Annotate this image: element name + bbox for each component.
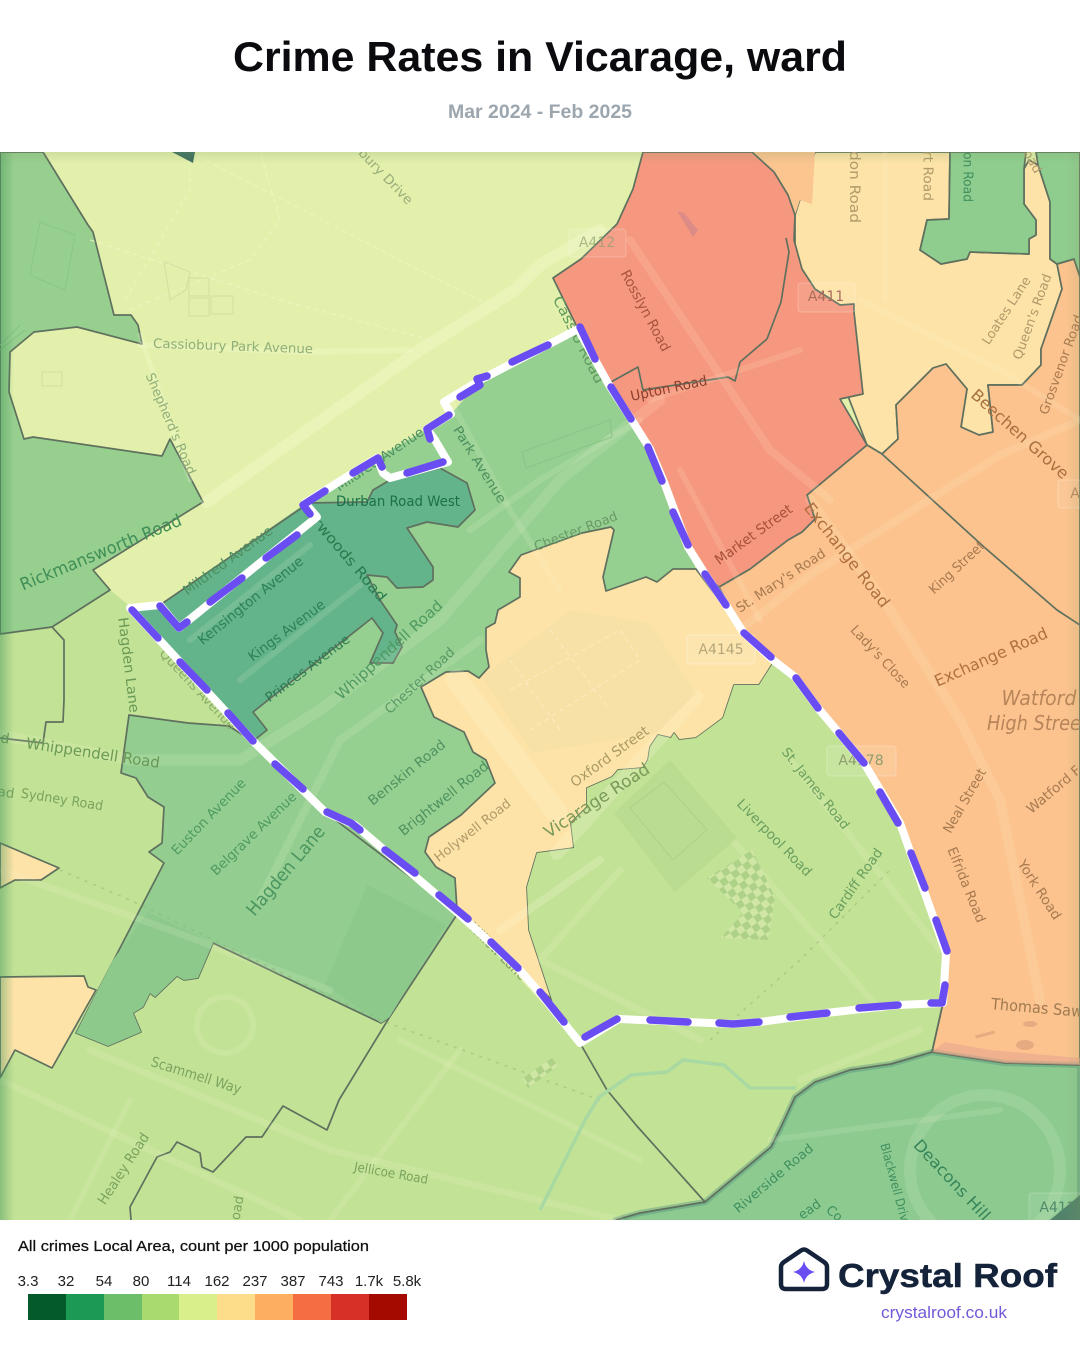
street labels: Oxford Street [568,723,653,791]
street labels: Rickmansworth Road [17,511,185,595]
zone: ward cream [421,527,773,1000]
road badges [569,229,1080,1223]
logo: Crystal Roof [781,1250,1058,1322]
street labels: Cassio Road [549,294,607,386]
street labels: Deacons Hill [910,1135,994,1225]
street labels: Jellicoe Road [352,1160,429,1188]
legend tick labels: 743 [318,1273,344,1290]
zone: bottom boundary line [616,1052,1080,1220]
street labels: Exchange Road [800,499,894,611]
street labels: Healey Road [95,1130,153,1208]
street labels: Scammell Way [149,1054,243,1098]
street labels: bury Drive [355,146,415,208]
zone: right orange [719,259,1080,1065]
badge A411 [798,283,855,312]
street labels: Co [823,1203,845,1225]
street labels: Princes Avenue [263,632,353,706]
legend tick labels: 5.8k [393,1273,422,1290]
choropleth zones [0,152,1080,1225]
zone: top orange strip [752,152,815,215]
rail platforms west [0,325,25,350]
zone: darker strip west [76,942,213,1046]
parcel: park buildings [30,222,233,386]
badge A412: A412 [579,235,615,251]
legend tick labels: 162 [204,1273,230,1290]
street labels: Queens Avenue [156,646,238,734]
street labels: ead [796,1197,824,1223]
salmon inner boundary [611,238,789,390]
zone: far-right green [1036,152,1080,277]
wordmark: Crystal Roof [838,1257,1058,1294]
street labels: Chester Road [382,644,458,718]
street labels: Vicarage Road [540,759,654,843]
zone: top-right green pocket [920,152,1036,264]
checkered estate [707,850,775,940]
street labels: York Road [1013,856,1064,923]
parcel: cricket pavilion rows [522,420,612,468]
street labels: Durban Road West [336,494,460,510]
legend tick labels: 114 [167,1273,191,1290]
stadium [614,760,737,892]
legend title: All crimes Local Area, count per 1000 population [18,1238,369,1255]
street labels: rt Road [920,151,934,201]
legend tick labels: 32 [58,1273,74,1290]
street labels: oad [1019,148,1045,176]
zone: upper-left green [0,152,203,634]
street labels: Euston Avenue [169,775,249,859]
orange inner boundary [882,454,1080,625]
map edge vignette [0,152,1080,1220]
street labels: Neal Street [940,766,990,836]
dashed paths and railway [60,870,890,1100]
badge A4145 [687,635,755,664]
legend tick labels: 237 [242,1273,268,1290]
street labels: Watford [1002,686,1077,710]
pond marks [975,1021,1037,1050]
street labels: St. James Road [778,745,852,833]
ward boundary: white line [130,329,946,1043]
street labels: Cassiobury Park Avenue [153,337,313,357]
zone: top-right cream [795,152,1062,454]
zone: dark green Kensington Avenue [130,468,475,742]
street labels: Elfrida Road [944,845,988,925]
street labels: on Road [960,152,974,202]
zone: lower-left light green [0,590,943,1220]
icon: house with star [781,1250,827,1289]
street labels: Shepherd's Road [142,371,198,477]
legend tick labels [18,1273,422,1290]
street labels: oad [229,1195,247,1221]
badge A412 [569,229,626,257]
legend tick labels: 54 [96,1273,112,1290]
street labels: St. Mary's Road [733,546,829,616]
street labels: don Road [846,151,862,223]
legend tick labels: 80 [133,1273,149,1290]
street labels: Chester Road [532,509,620,555]
river [540,1060,796,1210]
badge A411: A411 [808,289,844,305]
street labels: Upton Road [629,373,709,405]
street labels: Rosslyn Road [617,268,673,354]
badge A4145: A4145 [698,642,744,658]
street labels: Whippendell Road [332,596,446,704]
street labels: Park Avenue [449,424,509,506]
legend [18,1238,422,1320]
street labels: Brightwell Road [396,759,492,839]
street labels: rwoods Road [309,515,389,605]
street labels: Kensington Avenue [195,554,307,648]
legend colour ramp [28,1294,407,1320]
street labels: King Street [926,538,988,598]
street labels: Whippendell Road [25,734,161,772]
badge A4178: A4178 [838,753,884,769]
website: crystalroof.co.uk [881,1304,1008,1322]
retail block [654,690,696,734]
zone: ward light green [527,663,946,1043]
street labels: Lady's Close [847,622,913,692]
title: Crime Rates in Vicarage, ward [233,33,847,80]
street labels: Kings Avenue [245,597,329,665]
zone: left cream lower [0,976,96,1078]
street labels [0,146,1080,1225]
street labels: Cardiff Road [826,845,886,923]
street labels: Hagden Lane [242,822,330,920]
street labels: Blackwell Driv [877,1141,913,1223]
badge A4178 [827,746,896,776]
zone: Hagden Lane green [76,715,458,1046]
street labels: Exchange Road [931,624,1051,690]
lower-left boundaries [0,627,943,1220]
street labels: Benskin Road [365,737,449,809]
legend tick labels: 387 [280,1273,306,1290]
legend tick labels: 3.3 [18,1273,38,1290]
river shore shadow [932,1042,1080,1065]
stadium pitch [630,782,707,860]
retail dashed paths [510,630,640,730]
street labels: Market Street [712,501,796,569]
street labels: Willow Lane [465,920,529,984]
park paths [90,152,500,340]
badge A4125 [1029,1193,1080,1223]
street labels: Beechen Grove [967,385,1073,483]
zone: Hagden Lane darker patch [376,992,406,1023]
street labels: Mildred Avenue [180,523,276,599]
legend tick labels: 1.7k [355,1273,384,1290]
street labels: Mildred Avenue [333,425,427,495]
zone: salmon Rosslyn Road [553,152,867,587]
street labels: Liverpool Road [733,796,815,880]
zone: bottom green [616,1052,1080,1225]
street labels: Holywell Road [432,796,514,866]
street labels: Loates Lane [979,274,1035,348]
zone: Vicarage ward green [226,334,696,904]
street labels: Hagden Lane [114,616,142,714]
ward boundary: purple dashes [132,327,947,1037]
badge A right [1058,480,1080,508]
street labels: Sydney Road [20,786,104,814]
badge A right: A [1070,486,1080,502]
subtitle: date range: Mar 2024 - Feb 2025 [448,102,632,123]
zone: left cream upper [0,843,59,888]
street labels: Queen's Road [1011,272,1055,362]
street labels: Belgrave Avenue [208,789,300,879]
red pond [677,211,698,237]
top dark fragment [172,152,195,163]
checkered footway [522,1058,558,1088]
bottom right dark fragment [1050,1195,1080,1220]
street labels: Riverside Road [731,1141,817,1217]
